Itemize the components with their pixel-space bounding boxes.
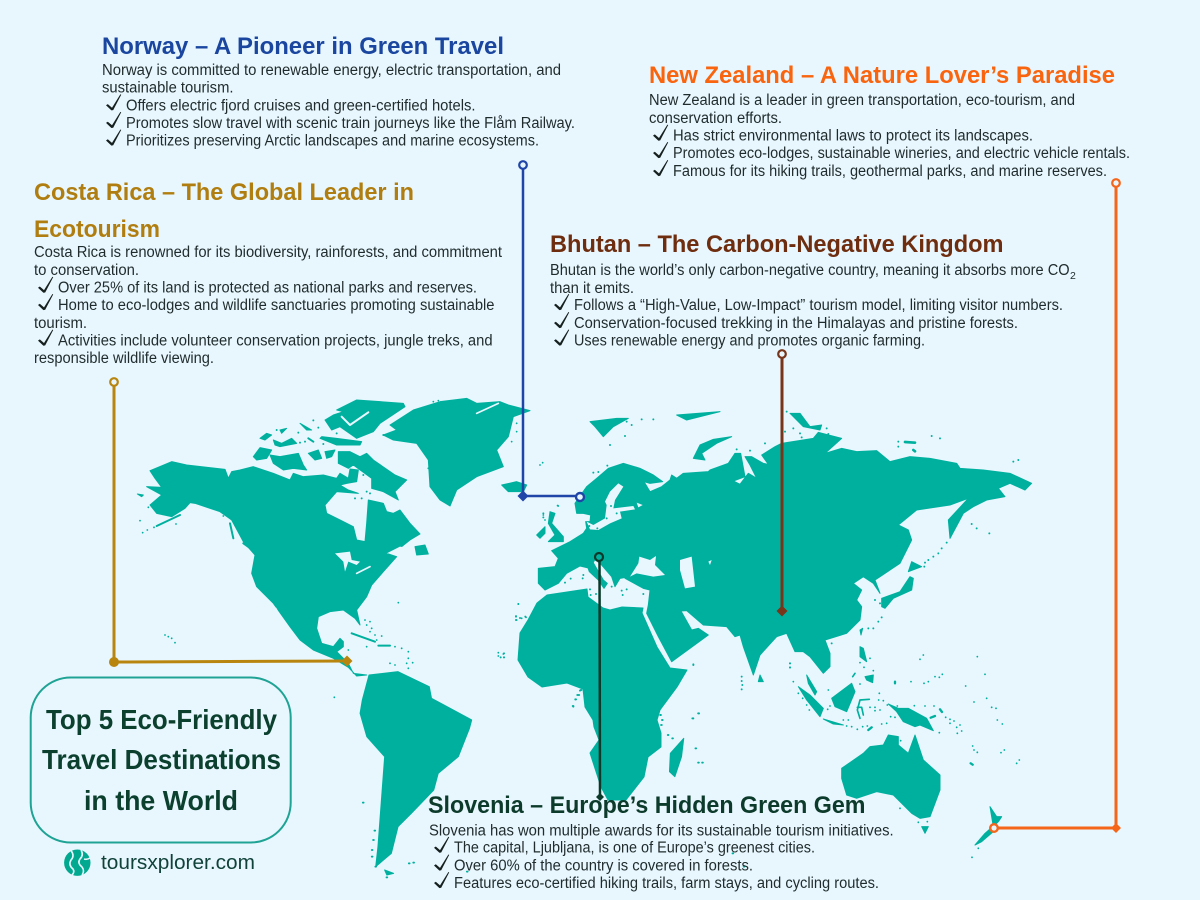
checklist: Norway: Offers electric fjord cruises and green-certified hotels.: [126, 97, 476, 114]
map: North America and Greenland: [137, 398, 558, 697]
connector: Costa Rica: [109, 378, 352, 667]
panel: Norway: [102, 33, 575, 150]
map: Baltic Sea: [585, 466, 643, 530]
panel: Slovenia: [428, 792, 894, 892]
website text: toursxplorer.com: [101, 852, 255, 874]
panel: Bhutan: [550, 231, 1076, 350]
connector: Norway: [518, 161, 584, 501]
text: New Zealand description: conservation efforts.: [649, 110, 782, 127]
checklist: New Zealand: Has strict environmental laws to protect its landscapes.: [673, 128, 1033, 145]
map: Eurasia: [538, 412, 1032, 689]
checklist: Costa Rica: responsible wildlife viewing.: [34, 350, 214, 367]
map: Southeast Asia, Australia and New Zealand: [790, 628, 1019, 857]
checklist: Norway: Promotes slow travel with scenic train journeys like the Flåm Railway.: [126, 115, 575, 132]
text: Bhutan description: than it emits.: [550, 280, 634, 297]
checklist: Slovenia: Features eco-certified hiking trails, farm stays, and cycling routes.: [454, 875, 879, 892]
text: Bhutan description: [550, 262, 1076, 297]
heading: New Zealand: New Zealand – A Nature Lover’s Paradise: [649, 62, 1115, 89]
heading: Slovenia: Slovenia – Europe’s Hidden Green Gem: [428, 792, 866, 819]
text: Norway description: Norway is committed to renewable energy, electric transportation, and: [102, 62, 561, 79]
text: Bhutan description: Bhutan is the world’s only carbon-negative country, meaning it absorbs more CO: [550, 262, 1070, 279]
world map: [137, 398, 1032, 877]
panel: Costa Rica: [34, 179, 503, 367]
connector: Slovenia: [595, 553, 604, 801]
map: Africa: [518, 589, 687, 800]
text: Costa Rica description: to conservation.: [34, 262, 139, 279]
title text: in the World: [84, 785, 238, 816]
heading: Costa Rica second line: Ecotourism: [34, 216, 160, 243]
checklist: Norway: [106, 94, 575, 150]
checklist: Costa Rica: [34, 277, 494, 367]
text: Slovenia description: Slovenia has won multiple awards for its sustainable tourism initiatives.: [429, 823, 894, 840]
text: Costa Rica description: [34, 244, 503, 279]
text: New Zealand description: New Zealand is a leader in green transportation, eco-tourism, and: [649, 92, 1075, 109]
map: Europe islands and Mediterranean: [501, 506, 699, 718]
checklist: Slovenia: Over 60% of the country is covered in forests.: [454, 858, 753, 874]
text: Bhutan description: 2: [1070, 270, 1076, 282]
panel: New Zealand: [649, 62, 1130, 180]
checklist: Bhutan: Uses renewable energy and promotes organic farming.: [574, 332, 925, 350]
checklist: New Zealand: [653, 125, 1130, 180]
checklist: Bhutan: Follows a “High-Value, Low-Impact” tourism model, limiting visitor numbers.: [574, 297, 1063, 314]
heading: Bhutan: Bhutan – The Carbon-Negative Kingdom: [550, 231, 1004, 258]
text: Norway description: sustainable tourism.: [102, 80, 234, 97]
checklist: Costa Rica: Activities include volunteer conservation projects, jungle treks, and: [58, 333, 493, 350]
checklist: Slovenia: The capital, Ljubljana, is one of Europe’s greenest cities.: [454, 840, 815, 857]
checklist: Costa Rica: Over 25% of its land is protected as national parks and reserves.: [58, 280, 477, 297]
checklist: Norway: Prioritizes preserving Arctic landscapes and marine ecosystems.: [126, 132, 539, 150]
checklist: Costa Rica: tourism.: [34, 315, 87, 332]
checklist: Bhutan: Conservation-focused trekking in the Himalayas and pristine forests.: [574, 315, 1018, 332]
map: South America, Madagascar and islands: [360, 672, 744, 877]
checklist: Bhutan: [554, 294, 1063, 350]
checklist: New Zealand: Promotes eco-lodges, sustainable wineries, and electric vehicle rentals.: [673, 145, 1130, 162]
logo: toursxplorer: [64, 850, 255, 876]
connector: Bhutan: [776, 350, 788, 616]
checklist: Slovenia: [434, 837, 879, 892]
title text: Top 5 Eco-Friendly: [46, 704, 277, 735]
checklist: Costa Rica: Home to eco-lodges and wildlife sanctuaries promoting sustainable: [58, 297, 494, 314]
text: Costa Rica description: Costa Rica is renowned for its biodiversity, rainforests, and commitment: [34, 244, 503, 261]
text: Norway description: [102, 62, 561, 97]
heading: Norway: Norway – A Pioneer in Green Travel: [102, 33, 504, 60]
title text: Travel Destinations: [42, 744, 281, 775]
title text: [42, 704, 281, 816]
text: New Zealand description: [649, 92, 1075, 127]
icon: globe: [64, 850, 91, 876]
map: Canadian Arctic islands: [253, 400, 407, 500]
heading: Costa Rica: Costa Rica – The Global Leader in: [34, 179, 414, 206]
connector: New Zealand: [990, 179, 1121, 833]
checklist: New Zealand: Famous for its hiking trails, geothermal parks, and marine reserves.: [673, 163, 1107, 180]
title box: [31, 678, 291, 842]
